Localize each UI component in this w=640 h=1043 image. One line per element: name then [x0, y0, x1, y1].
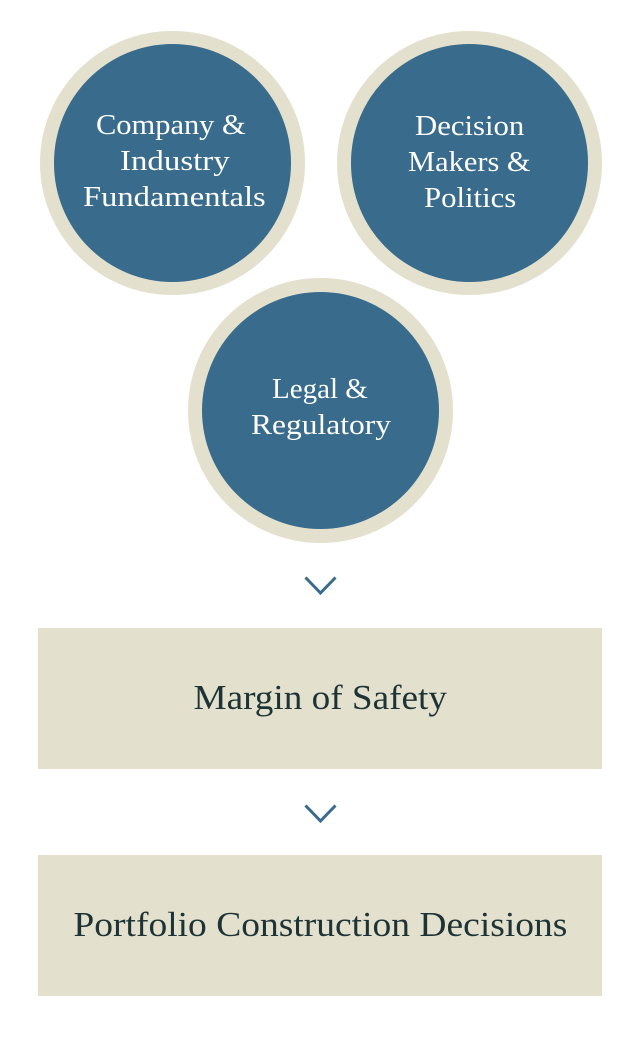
circle text: Company & Industry Fundamentals: Fundamentals: [83, 181, 266, 213]
circle text: Decision Makers & Politics: Decision: [415, 110, 524, 142]
arrow: chevron down to portfolio construction: [304, 804, 336, 823]
circle text: Company & Industry Fundamentals: Industry: [120, 145, 230, 177]
circle: Company & Industry Fundamentals: [40, 30, 304, 295]
box: Margin of Safety: Margin of Safety: [193, 678, 447, 717]
circle text: Legal & Regulatory: [251, 373, 391, 441]
box: Margin of Safety: [38, 628, 602, 769]
box: Portfolio Construction Decisions: Portfolio Construction Decisions: [73, 905, 567, 944]
circle: Decision Makers & Politics: [337, 30, 602, 295]
circle text: Company & Industry Fundamentals: [83, 109, 266, 213]
circle text: Decision Makers & Politics: Makers &: [408, 146, 531, 178]
circle text: Decision Makers & Politics: Politics: [424, 182, 516, 214]
circle: Legal & Regulatory: [188, 278, 452, 542]
circle text: Company & Industry Fundamentals: Company &: [96, 109, 246, 141]
circle text: Decision Makers & Politics: [408, 110, 531, 214]
arrow: chevron down to margin of safety: [304, 576, 336, 595]
circle text: Legal & Regulatory: Legal &: [272, 373, 368, 405]
box: Portfolio Construction Decisions: [38, 855, 602, 996]
circle text: Legal & Regulatory: Regulatory: [251, 409, 391, 441]
